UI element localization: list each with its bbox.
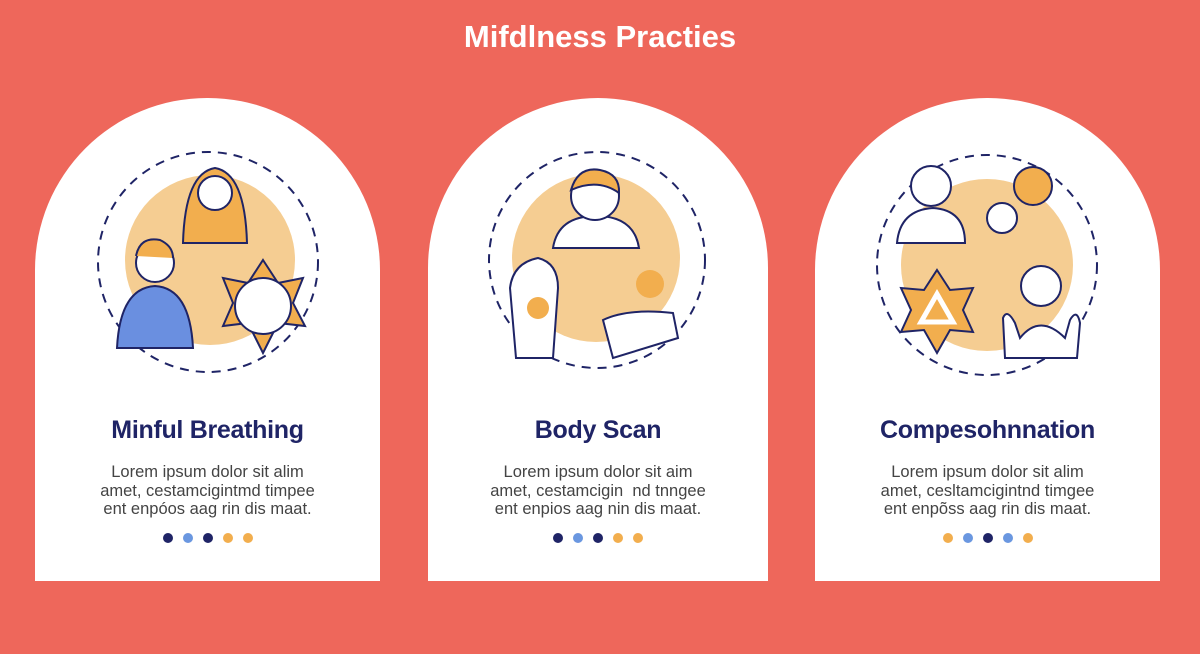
panel: compassion [815, 98, 1160, 581]
icon: compassion illustration [876, 154, 1098, 376]
text block: ent enpóos aag rin dis maat. [103, 500, 312, 518]
panel: mindful breathing [35, 98, 380, 581]
text block: amet, cestamcigintmd timpee [100, 482, 315, 500]
heading: Compesohnnation [880, 416, 1095, 444]
text block: ent enpios aag nin dis maat. [495, 500, 701, 518]
text block: Lorem ipsum dolor sit aim [504, 463, 692, 481]
text block: amet, cestamcigin nd tnngee [490, 482, 706, 500]
panel: body scan [428, 98, 768, 581]
text block: ent enpõss aag rin dis maat. [884, 500, 1091, 518]
heading: Minful Breathing [111, 416, 304, 444]
text block: amet, cesltamcigintnd timgee [881, 482, 1094, 500]
dots [553, 533, 643, 543]
text block: Lorem ipsum dolor sit alim [891, 463, 1084, 481]
text block: Lorem ipsum dolor sit alim [111, 463, 304, 481]
text block [490, 463, 706, 518]
icon: breathing illustration [97, 151, 319, 373]
text block [100, 463, 315, 518]
heading: Body Scan [535, 416, 661, 444]
dots [943, 533, 1033, 543]
text block [881, 463, 1094, 518]
icon: body scan illustration [488, 151, 706, 369]
dots [163, 533, 253, 543]
title: Mifdlness Practies [464, 19, 736, 54]
